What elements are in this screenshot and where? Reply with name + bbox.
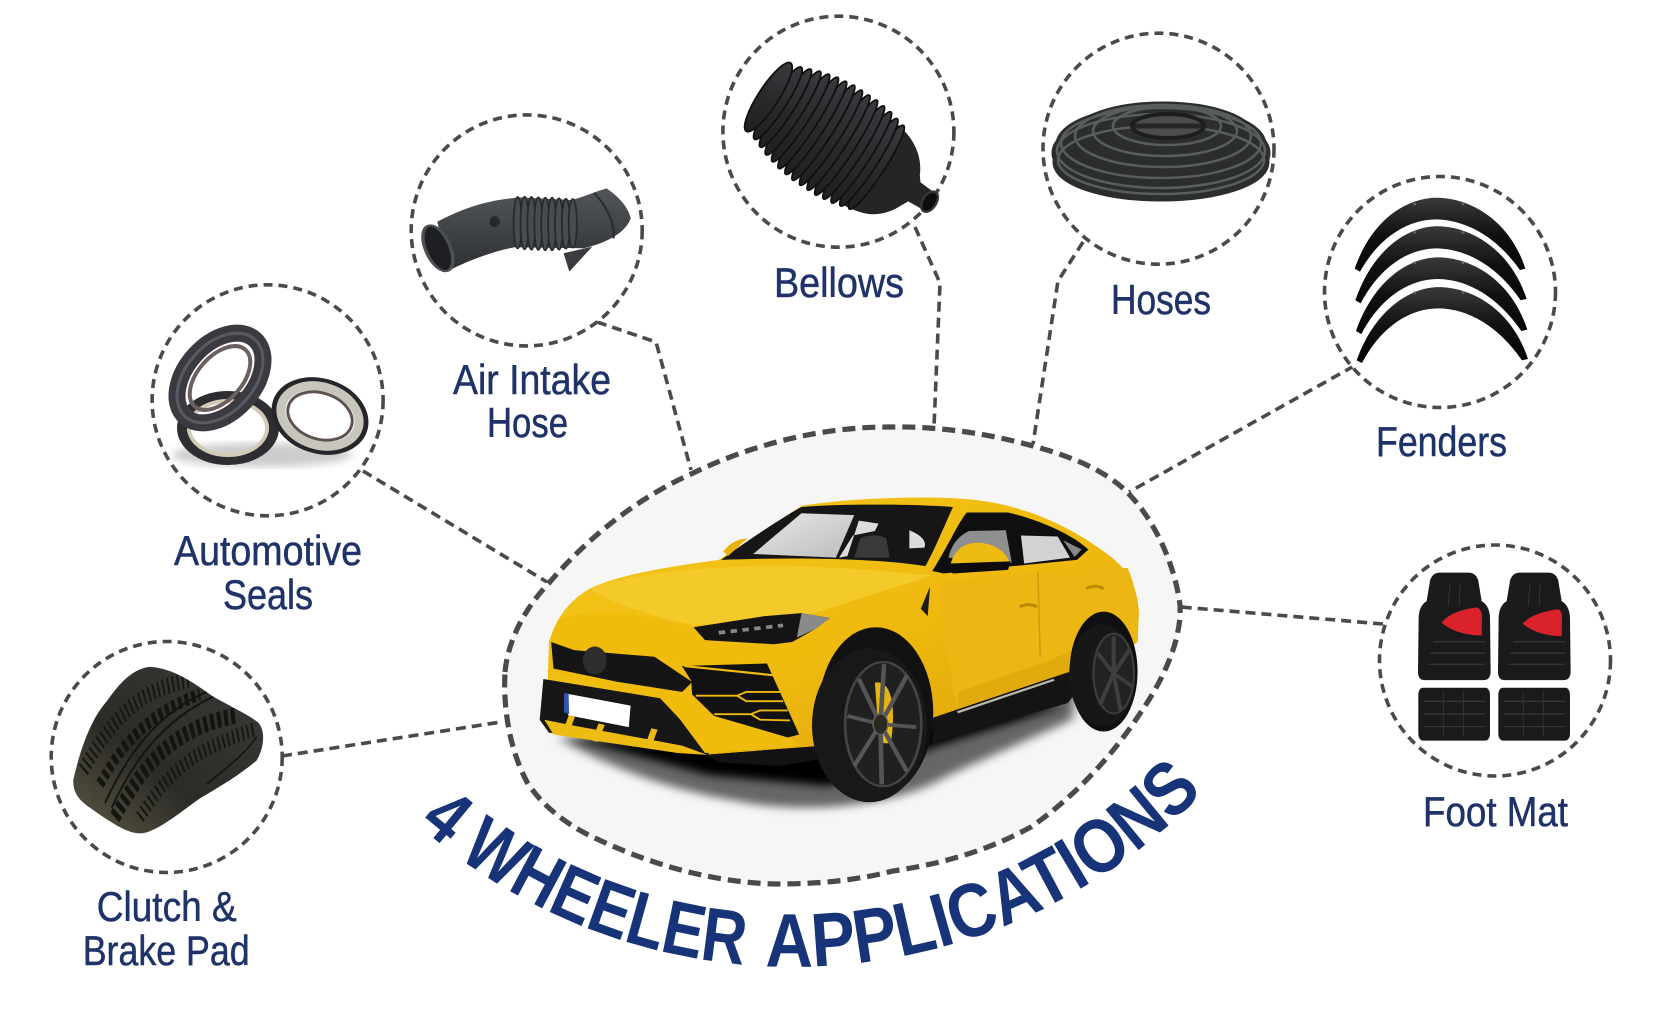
icon: car floor mats bbox=[1418, 573, 1571, 741]
rear wheel bbox=[1069, 624, 1135, 726]
label: Clutch & bbox=[97, 883, 237, 930]
icon: corrugated intake hose bbox=[417, 188, 631, 273]
number plate bbox=[564, 693, 631, 727]
icon: rubber bellows bbox=[729, 44, 966, 253]
title: 4 wheeler applications: 4 WHEELER bbox=[425, 796, 745, 965]
panel: clutch and brake pad bbox=[51, 642, 282, 974]
label: Foot Mat bbox=[1423, 788, 1568, 835]
front wheel bbox=[812, 648, 927, 802]
icon: four fender flares bbox=[1355, 198, 1528, 363]
title: 4 wheeler applications bbox=[425, 762, 1196, 967]
icon: coiled hose bbox=[1053, 105, 1269, 198]
side mirror bbox=[941, 543, 1010, 574]
lower bumper bbox=[540, 679, 710, 756]
connector: automotive seals to car bbox=[363, 471, 547, 582]
label bbox=[453, 356, 611, 446]
connector: bellows to car bbox=[915, 227, 940, 427]
side air intake bbox=[682, 663, 799, 737]
dashed circle bbox=[1043, 33, 1274, 264]
left wing mirror bbox=[723, 538, 747, 556]
dashed blob outline bbox=[505, 427, 1180, 884]
headlight bbox=[694, 613, 830, 644]
label: Air Intake bbox=[453, 356, 611, 403]
label: Fenders bbox=[1376, 418, 1507, 465]
body bbox=[547, 497, 1139, 755]
dashed circle bbox=[723, 16, 954, 247]
connector: foot mat to car bbox=[1181, 607, 1383, 624]
dashed circle bbox=[1380, 545, 1610, 776]
hood highlight bbox=[590, 565, 932, 625]
label bbox=[174, 527, 362, 618]
connector: fenders to car bbox=[1129, 366, 1354, 492]
icon: pedal pad bbox=[73, 667, 263, 833]
windshield bbox=[721, 505, 953, 566]
icon: oil seal rings bbox=[160, 317, 376, 467]
door shading bbox=[939, 568, 1138, 712]
panel: air intake hose bbox=[411, 115, 642, 446]
label: Hose bbox=[487, 399, 568, 446]
label: Brake Pad bbox=[83, 927, 250, 974]
side windows bbox=[932, 512, 1088, 574]
dashed circle bbox=[152, 285, 383, 516]
connector: clutch and brake pad to car bbox=[282, 722, 501, 756]
label: Hoses bbox=[1111, 276, 1211, 323]
label: Bellows bbox=[774, 259, 904, 306]
connector: air intake hose to car bbox=[597, 322, 691, 470]
dashed circle bbox=[51, 642, 282, 872]
front wheel arch bbox=[818, 627, 933, 797]
car illustration bbox=[540, 497, 1139, 808]
upper grille bbox=[551, 642, 692, 692]
dashed circle bbox=[411, 115, 642, 346]
panel: foot mat bbox=[1380, 545, 1610, 835]
title: 4 wheeler applications: APPLICATIONS bbox=[767, 762, 1196, 967]
panel: hoses bbox=[1043, 33, 1274, 323]
central car panel bbox=[505, 427, 1180, 884]
side vent bbox=[921, 586, 930, 616]
panel: fenders bbox=[1324, 176, 1556, 465]
rear wheel arch and sill bbox=[1070, 612, 1138, 732]
connector: hoses to car bbox=[1033, 242, 1083, 444]
label: Seals bbox=[223, 571, 313, 618]
label: Automotive bbox=[174, 527, 362, 574]
label bbox=[83, 883, 250, 974]
panel: automotive seals bbox=[152, 285, 383, 618]
dashed circle bbox=[1324, 176, 1556, 408]
panel: bellows bbox=[723, 16, 966, 306]
